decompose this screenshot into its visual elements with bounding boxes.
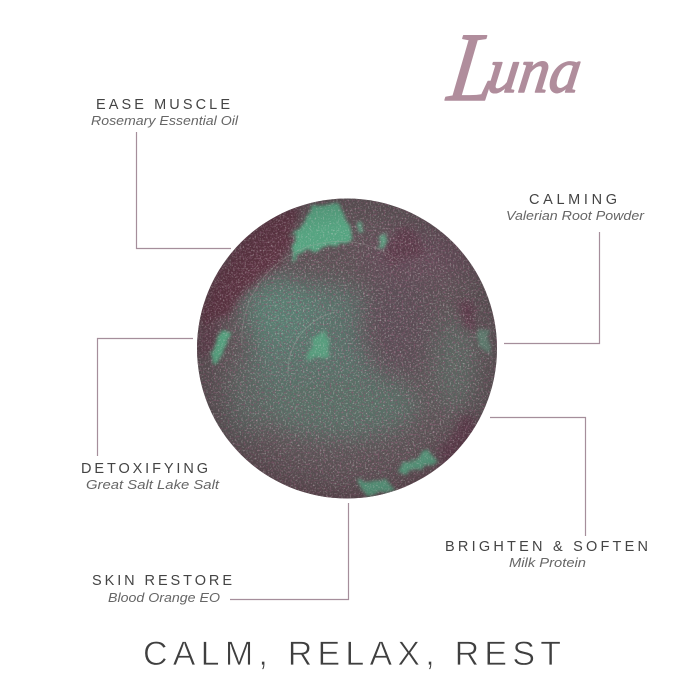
label: brighten and soften (445, 539, 648, 570)
label: ease muscle (91, 97, 239, 128)
connector: detoxifying (98, 338, 193, 456)
green patches bottom (396, 450, 438, 474)
bath bomb photo (197, 198, 497, 498)
label: skin restore: SKIN RESTORE (92, 573, 232, 589)
connector: skin restore (230, 503, 348, 600)
label: skin restore: Blood Orange EO (108, 590, 220, 605)
label: brighten and soften: BRIGHTEN & SOFTEN (445, 539, 648, 555)
label: detoxifying: DETOXIFYING (81, 461, 208, 477)
title: Luna: una (484, 35, 586, 106)
label: calming (506, 192, 645, 223)
title: Luna (441, 13, 586, 122)
green patch centre (305, 330, 330, 360)
ring marks (242, 241, 400, 345)
connector: calming (504, 232, 600, 344)
label: ease muscle: EASE MUSCLE (96, 97, 230, 113)
green patch top (288, 204, 353, 262)
title: Luna: L (441, 13, 504, 122)
label: detoxifying: Great Salt Lake Salt (86, 477, 221, 492)
connector: ease muscle (136, 132, 231, 248)
label: calming: CALMING (529, 192, 617, 208)
maroon patch upper left (197, 205, 300, 330)
connector: brighten and soften (490, 418, 586, 536)
tagline: CALM, RELAX, REST (143, 635, 561, 673)
green patch left (211, 330, 230, 365)
label: calming: Valerian Root Powder (506, 208, 645, 223)
label: detoxifying (81, 461, 221, 492)
label: skin restore (92, 573, 232, 605)
label: ease muscle: Rosemary Essential Oil (91, 113, 239, 128)
label: brighten and soften: Milk Protein (509, 555, 586, 570)
